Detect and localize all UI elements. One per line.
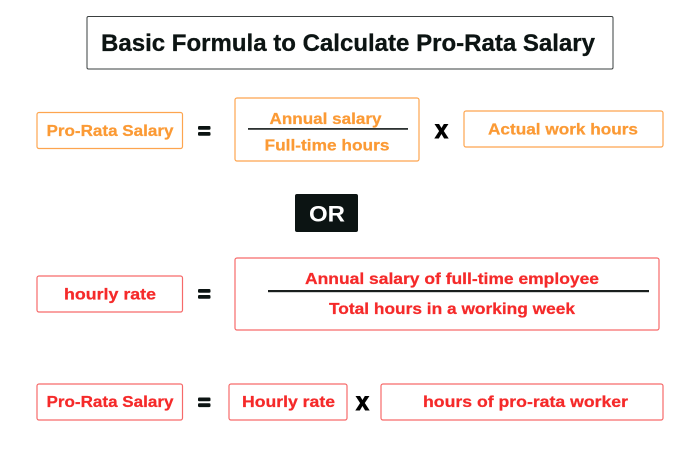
equals sign [198, 289, 210, 299]
box: hourly rate: Hourly rate [242, 394, 335, 411]
multiply sign: x [435, 114, 448, 144]
box: annual salary over full-time hours: Full-time hours [264, 138, 390, 155]
box: hourly rate [37, 276, 182, 312]
box: annual salary over total hours: Total hours in a working week [329, 301, 575, 318]
or badge [295, 194, 358, 232]
box: annual salary over full-time hours [235, 98, 419, 161]
title: Basic Formula to Calculate Pro-Rata Salary [101, 30, 596, 57]
panel: orange formula [37, 98, 663, 161]
title [87, 16, 613, 69]
equals sign [198, 398, 210, 407]
box: hours of pro-rata worker: hours of pro-rata worker [423, 394, 628, 411]
equals sign [198, 126, 210, 136]
box: pro-rata salary: Pro-Rata Salary [46, 123, 174, 140]
or badge: OR [309, 202, 345, 226]
panel: pro-rata from hourly rate formula [37, 384, 663, 420]
box: actual work hours [464, 111, 663, 147]
box: hours of pro-rata worker [381, 384, 663, 420]
box: annual salary over total hours [235, 258, 659, 330]
box: pro-rata salary [37, 112, 182, 148]
box: hourly rate: hourly rate [64, 286, 156, 303]
box: hourly rate [229, 384, 347, 420]
box: pro-rata salary [37, 384, 182, 420]
box: pro-rata salary: Pro-Rata Salary [46, 394, 174, 411]
multiply sign: x [356, 386, 369, 416]
box: annual salary over full-time hours: Annual salary [270, 111, 382, 128]
box: annual salary over total hours: Annual salary of full-time employee [305, 271, 599, 288]
box: actual work hours: Actual work hours [488, 121, 638, 138]
panel: hourly rate formula [37, 258, 659, 330]
